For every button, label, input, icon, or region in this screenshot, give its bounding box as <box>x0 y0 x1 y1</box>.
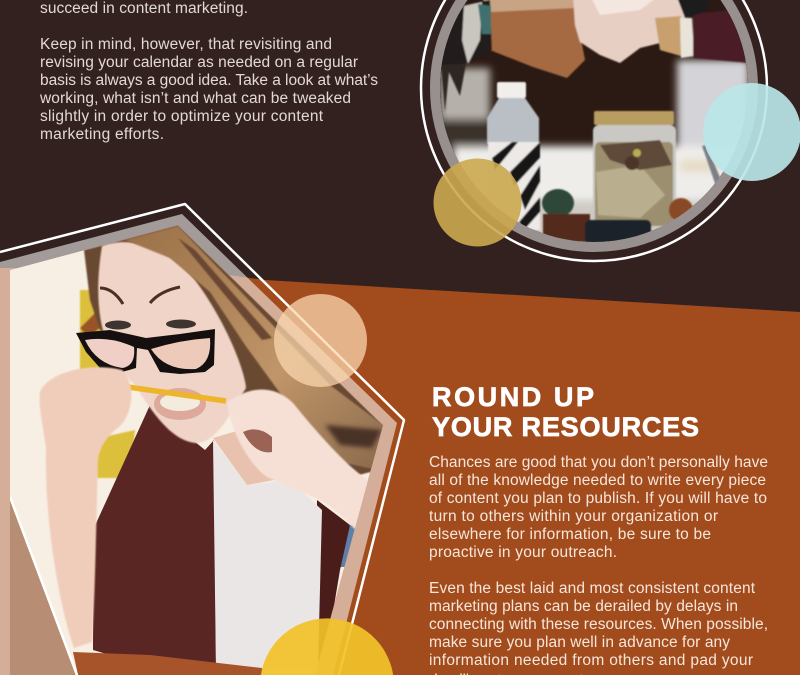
photo: fist bump in circle frame <box>421 0 800 261</box>
heading: round up your resources <box>432 382 699 442</box>
text block: resources advice: all of the knowledge needed to write every piece <box>429 472 766 489</box>
text block: resources advice: connecting with these resources. When possible, <box>429 616 768 633</box>
text block: resources advice: Even the best laid and most consistent content <box>429 580 756 597</box>
neck <box>213 432 275 485</box>
eyes <box>105 320 131 330</box>
yellow background <box>80 290 135 478</box>
text block: resources advice: turn to others within your organization or <box>429 508 718 525</box>
white top <box>213 440 322 668</box>
text block: calendar advice: revising your calendar as needed on a regular <box>40 54 358 71</box>
heading: round up your resources: YOUR RESOURCES <box>432 412 699 442</box>
text block: resources advice <box>429 454 768 675</box>
text block: calendar advice: working, what isn’t and what can be tweaked <box>39 90 351 107</box>
circle: teal accent <box>703 83 800 181</box>
pencil <box>121 386 226 401</box>
hands <box>440 0 750 112</box>
text block: resources advice: proactive in your outreach. <box>429 544 617 561</box>
heading: round up your resources: ROUND UP <box>432 382 594 412</box>
desk <box>73 652 262 675</box>
text block: resources advice: of content you plan to publish. If you will have to <box>429 490 767 507</box>
translucent frame band <box>0 214 397 675</box>
circle outline <box>421 0 767 261</box>
text block: calendar advice: Keep in mind, however, that revisiting and <box>40 36 332 53</box>
text block: calendar advice <box>39 0 378 143</box>
glasses <box>76 329 215 374</box>
photo scene <box>10 225 390 675</box>
text block: resources advice: information needed from others and pad your <box>429 652 753 669</box>
text block: calendar advice: slightly in order to optimize your content <box>40 108 324 125</box>
brows <box>100 287 180 304</box>
circle: peach accent <box>274 294 367 387</box>
white frame outline <box>0 204 404 675</box>
text block: resources advice: make sure you plan well in advance for any <box>429 634 730 651</box>
circle: yellow accent <box>261 618 393 675</box>
face <box>98 242 246 443</box>
circle: gold accent <box>434 158 522 246</box>
text block: resources advice: Chances are good that you don’t personally have <box>429 454 768 471</box>
cardigan <box>93 405 216 668</box>
mouth and teeth <box>154 388 206 420</box>
photo: woman biting pencil in polygon frame <box>0 204 404 675</box>
hair back <box>84 225 383 480</box>
jar <box>593 111 676 228</box>
left hand and arm <box>40 367 131 648</box>
desk objects <box>542 145 722 244</box>
text block: resources advice: elsewhere for information, be sure to be <box>429 526 711 543</box>
laptop edge <box>10 497 77 675</box>
hair strands <box>125 226 383 470</box>
circle band <box>435 0 753 247</box>
bottle <box>487 82 540 230</box>
right hand and arm <box>227 390 368 532</box>
text block: calendar advice: marketing efforts. <box>40 126 164 143</box>
text block: calendar advice: basis is always a good idea. Take a look at what’s <box>40 72 378 89</box>
laptop <box>10 497 77 675</box>
text block: calendar advice: succeed in content marketing. <box>40 0 248 17</box>
panel: rust section background <box>0 268 800 675</box>
photo scene <box>430 0 760 250</box>
text block: resources advice: marketing plans can be derailed by delays in <box>429 598 738 615</box>
